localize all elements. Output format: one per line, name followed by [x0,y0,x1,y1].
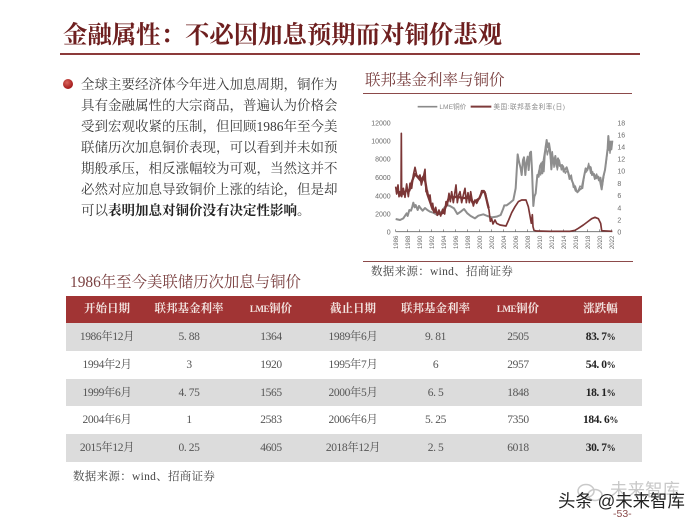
body text: 必然对应加息导致铜价上涨的结论，但是却 [81,182,338,197]
right axis labels: 6 [617,193,621,200]
right axis labels: 14 [617,145,625,152]
page number: -53- [613,508,632,520]
table header row: 联邦基金利率 [154,303,224,315]
table row 1999: 1848 [507,387,529,399]
chart legend [418,102,566,111]
table row 1986: 9.81 [425,331,446,343]
body text: 可以表明加息对铜价没有决定性影响。 [81,203,310,218]
table row 1999: 2000年5月 [329,387,377,399]
x axis: 2004 [502,235,508,249]
chart heading: 联邦基金利率与铜价 [365,72,505,89]
x axis: 1992 [430,235,436,249]
title rule [60,53,640,55]
right axis labels: 2 [617,217,621,224]
x axis: 2006 [514,235,520,249]
table row 2004: 2006年6月 [329,414,377,426]
table row 2004: 2004年6月 [83,414,131,426]
table header row: 开始日期 [84,303,130,315]
x axis: 1986 [394,235,400,249]
table row 1994: 1994年2月 [83,359,131,371]
table row 1994: 1920 [260,359,282,371]
table row 1994: 3 [186,359,192,371]
x axis: 2016 [574,235,580,249]
table row 1994: 1995年7月 [329,359,377,371]
table header row: 截止日期 [330,303,376,315]
chart legend: 美国:联邦基金利率(日) [493,102,566,111]
x axis: 2022 [610,235,616,249]
table row 2015 [66,434,642,462]
watermark: toutiao account: 头条 @未来智库 [558,491,685,511]
body text: 具有金融属性的大宗商品，普遍认为价格会 [81,98,338,113]
table row 2015: 0.25 [179,442,199,454]
right axis labels: 0 [617,229,621,236]
table row 1999: 4.75 [179,387,199,399]
right axis labels: 8 [617,181,621,188]
table heading: 1986年至今美联储历次加息与铜价 [70,274,301,291]
table row 1986: 83.7% [586,331,615,343]
table row 1986: 1986年12月 [80,331,134,343]
table row 2015: 2018年12月 [326,442,380,454]
table row 1999: 6.5 [428,387,443,399]
left axis labels: 10000 [371,139,391,146]
table row 1999: 1565 [260,387,282,399]
x axis: 2000 [478,235,484,249]
table row 1986: 5.88 [179,331,199,343]
body text: 受到宏观收紧的压制，但回顾1986年至今美 [81,119,338,134]
x axis: 1990 [418,235,424,249]
data table [66,296,642,462]
table row 2004: 2583 [260,414,282,426]
table row 1999: 18.1% [586,387,615,399]
x axis: 1998 [466,235,472,249]
table row 1986: 1364 [260,331,282,343]
table row 2015: 4605 [260,442,282,454]
table header row: LME铜价 [497,303,539,315]
chart source note: 数据来源：wind、招商证券 [371,266,513,278]
right axis labels: 4 [617,205,621,212]
right axis labels: 10 [617,169,625,176]
line chart: federal funds rate and LME copper [371,102,625,249]
x axis: 2014 [562,235,568,249]
x axis: 2012 [550,235,556,249]
chart bottom rule [363,260,633,262]
table header row: 涨跌幅 [583,303,618,315]
right axis labels [617,120,625,236]
body text: 期般承压，相反涨幅较为可观，当然这并不 [81,161,338,176]
x axis: 2010 [538,235,544,249]
table row 1986 [66,323,642,351]
series: LME copper price [396,136,612,220]
table row 2015: 2015年12月 [80,442,134,454]
table row 2004: 5.25 [425,414,446,426]
icon: watermark chat bubbles [577,484,603,502]
table header row: 联邦基金利率 [401,303,470,315]
table header row: LME铜价 [250,303,292,315]
x axis: 2002 [490,235,496,249]
table row 2015: 2.5 [428,442,443,454]
right axis labels: 16 [617,133,625,140]
table row 2004: 1 [186,414,192,426]
right axis labels: 18 [617,120,625,127]
table row 1986: 1989年6月 [329,331,377,343]
table row 1999 [66,379,642,406]
body text: 联储历次加息铜价表现，可以看到并未如预 [81,140,338,155]
table source note: 数据来源：wind、招商证券 [73,471,215,483]
table row 1994: 54.0% [586,359,615,371]
left axis labels: 0 [387,229,391,236]
body text: 全球主要经济体今年进入加息周期，铜作为 [81,77,338,92]
x axis: 1994 [442,235,448,249]
x axis: 2008 [526,235,532,249]
chart legend: LME铜价 [439,102,467,111]
left axis labels: 6000 [375,175,391,182]
table row 1999: 1999年6月 [83,387,131,399]
x axis: 2020 [598,235,604,249]
series: federal funds rate [396,133,612,231]
table row 2015: 6018 [507,442,529,454]
left axis labels: 2000 [375,211,391,218]
table row 2004 [66,406,642,434]
bullet icon [63,79,73,89]
left axis labels [371,120,391,236]
table row 2004: 184.6% [583,414,618,426]
x axis [394,229,616,249]
left axis labels: 8000 [375,157,391,164]
watermark: faint account name: 未来智库 [610,480,680,500]
table row 2004: 7350 [507,414,529,426]
body text [81,77,338,218]
x axis: 1988 [406,235,412,249]
left axis labels: 4000 [375,193,391,200]
chart heading rule [363,92,632,94]
table row 1994: 2957 [507,359,529,371]
right axis labels: 12 [617,157,625,164]
title: 金融属性：不必因加息预期而对铜价悲观 [63,22,502,49]
table row 1994: 6 [433,359,438,371]
left axis labels: 12000 [371,120,391,127]
x axis: 2018 [586,235,592,249]
table header row [66,296,642,323]
table row 2015: 30.7% [586,442,615,454]
table row 1986: 2505 [507,331,529,343]
table row 1994 [66,351,642,379]
x axis: 1996 [454,235,460,249]
